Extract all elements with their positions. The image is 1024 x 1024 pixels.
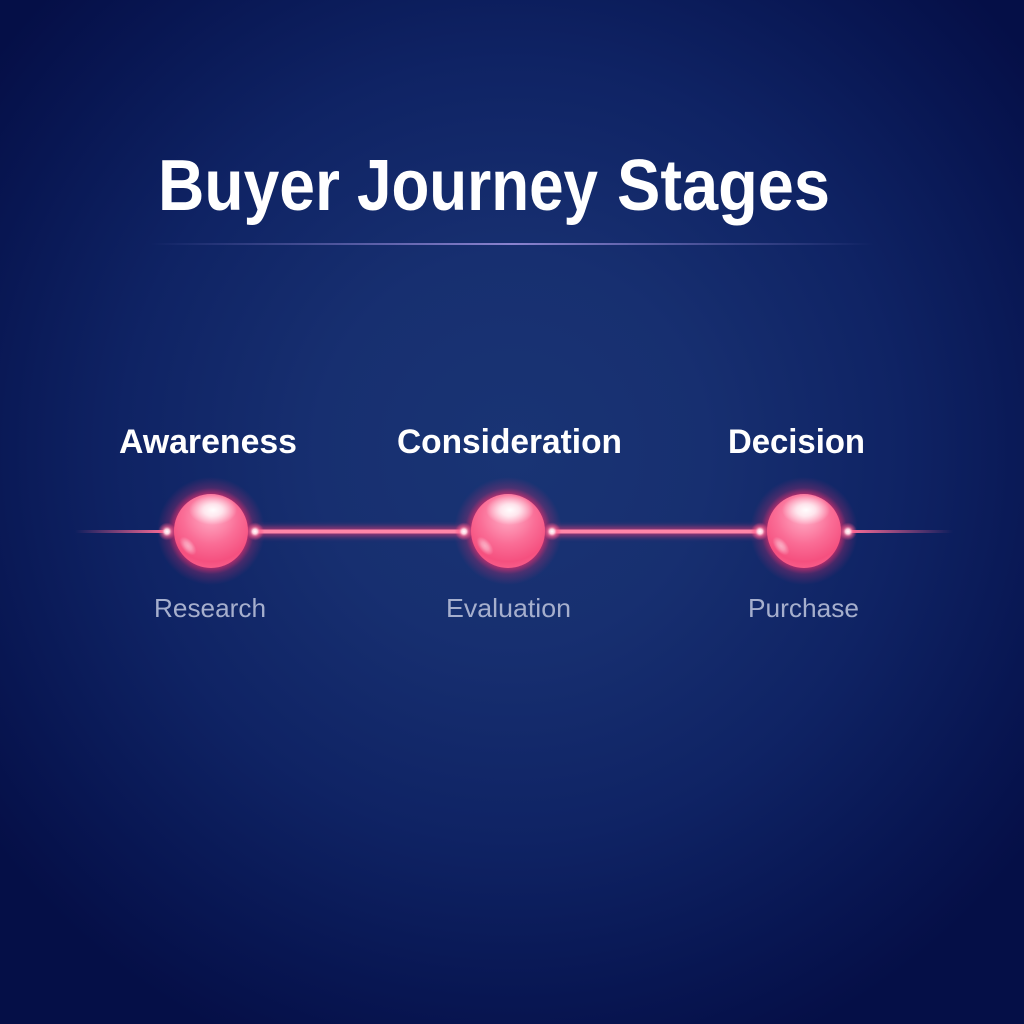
title bbox=[158, 146, 830, 226]
sublabel: Purchase: Purchase bbox=[748, 593, 859, 623]
title: Buyer bbox=[158, 146, 340, 226]
stage node: Awareness bbox=[157, 477, 265, 585]
heading: Consideration: Consideration bbox=[397, 423, 622, 461]
title underline bbox=[150, 243, 874, 245]
stage node: Consideration bbox=[454, 477, 562, 585]
stage sublabels bbox=[154, 593, 859, 623]
stage headings bbox=[119, 423, 865, 461]
timeline connector bbox=[75, 527, 953, 536]
stage node: Decision bbox=[750, 477, 858, 585]
heading: Awareness: Awareness bbox=[119, 423, 297, 461]
heading: Decision: Decision bbox=[728, 423, 865, 461]
sublabel: Research: Research bbox=[154, 593, 266, 623]
sublabel: Evaluation: Evaluation bbox=[446, 593, 571, 623]
title: Journey bbox=[357, 146, 598, 226]
title: Stages bbox=[617, 146, 830, 226]
